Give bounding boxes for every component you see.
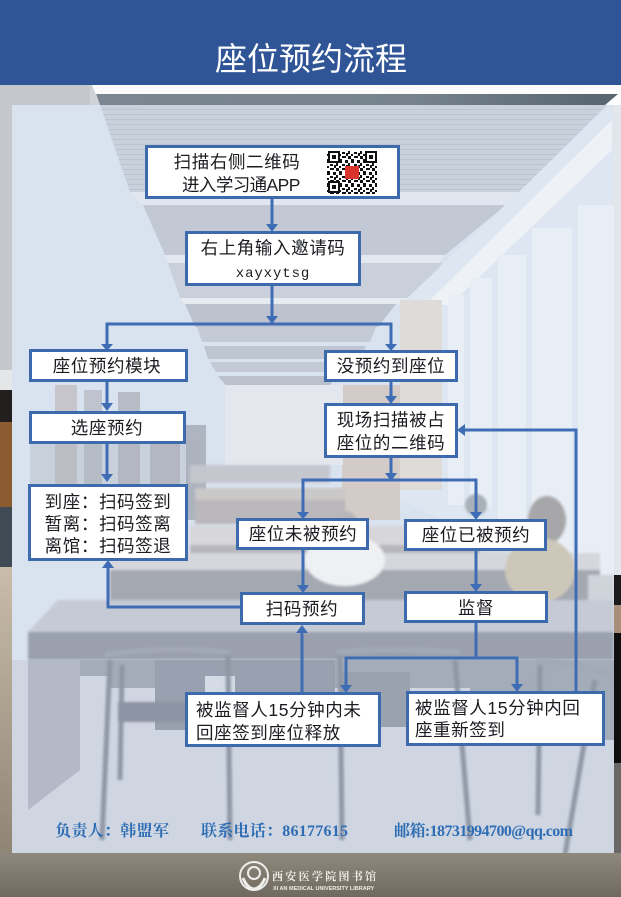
library logo: 西安医学院图书馆 (272, 869, 378, 883)
title: 座位预约流程 (215, 41, 407, 77)
connector: select seat to sign-in (101, 443, 113, 482)
ceiling (100, 105, 607, 390)
step: enter invite code: xayxytsg (236, 266, 310, 282)
connector: scan reserve back to sign-in (102, 560, 241, 607)
step: sign in and out: 离馆：扫码签退 (45, 536, 171, 556)
step: scan occupied seat code: 座位的二维码 (337, 433, 445, 453)
contact line: 负责人：韩盟军 (55, 821, 169, 840)
floor and table legs (12, 660, 614, 853)
flowchart (30, 146, 604, 746)
step: enter invite code (186, 232, 360, 284)
contact line: 联系电话：86177615 (201, 821, 348, 840)
step: scan QR code: 进入学习通APP (182, 175, 301, 195)
step: supervise: 监督 (458, 598, 494, 618)
step: not returned within 15 minutes: 回座签到座位释放 (196, 723, 341, 743)
step: returned within 15 minutes: 被监督人15分钟内回 (415, 698, 580, 718)
connector: seat reserved to supervise (470, 550, 482, 592)
reading tables and seated readers (28, 465, 614, 660)
step: sign in and out: 到座：扫码签到 (45, 492, 171, 512)
step: scan QR code (146, 146, 398, 198)
icon: QR code (326, 150, 379, 194)
chairs (102, 650, 614, 855)
connector: module to select seat (101, 381, 113, 411)
step: select seat: 选座预约 (71, 418, 143, 438)
step: not returned within 15 minutes: 被监督人15分钟内未 (196, 700, 361, 720)
step: seat reserved: 座位已被预约 (422, 525, 530, 545)
step: seat reservation module: 座位预约模块 (53, 356, 161, 376)
step: seat reserved (406, 520, 546, 550)
step: returned within 15 minutes (408, 692, 604, 744)
connector: scan branches to two seat states (297, 457, 482, 520)
step: scan to reserve (242, 594, 364, 624)
step: seat not reserved (238, 520, 368, 548)
connector: not returned to scan reserve (296, 625, 308, 693)
connector: returned loops back to scan (457, 424, 576, 692)
floor strip at the bottom (0, 853, 621, 897)
library logo: XI AN MEDICAL UNIVERSITY LIBRARY (273, 886, 374, 892)
step: no seat reserved: 没预约到座位 (337, 356, 445, 376)
step: sign in and out: 暂离：扫码签离 (45, 514, 171, 534)
connector: step 2 branches to reservation module and no seat (101, 285, 397, 351)
right wall (406, 188, 522, 300)
step: supervise (406, 592, 546, 622)
step: scan to reserve: 扫码预约 (266, 599, 338, 619)
step: seat reservation module (30, 350, 186, 380)
step: not returned within 15 minutes (186, 694, 380, 746)
connector: seat not reserved to scan reserve (297, 549, 309, 593)
step: scan QR code: 扫描右侧二维码 (174, 152, 300, 172)
header band (0, 0, 621, 85)
left shelves (30, 385, 206, 520)
connector: no seat to scan (385, 381, 397, 404)
connector: supervise branches to two outcomes (340, 622, 523, 693)
step: sign in and out (30, 486, 186, 560)
step: scan occupied seat code (326, 404, 456, 456)
library logo (240, 862, 378, 892)
step: scan occupied seat code: 现场扫描被占 (337, 410, 445, 430)
step: seat not reserved: 座位未被预约 (249, 524, 357, 544)
contact line (55, 821, 574, 840)
step: select seat (30, 412, 184, 442)
step: enter invite code: 右上角输入邀请码 (201, 238, 345, 258)
contact line: 邮箱:18731994700@qq.com (394, 821, 574, 840)
step: no seat reserved (326, 352, 456, 380)
connector: step 1 to step 2 (266, 198, 278, 232)
step: returned within 15 minutes: 座重新签到 (415, 720, 506, 740)
icon: library emblem (240, 862, 268, 890)
